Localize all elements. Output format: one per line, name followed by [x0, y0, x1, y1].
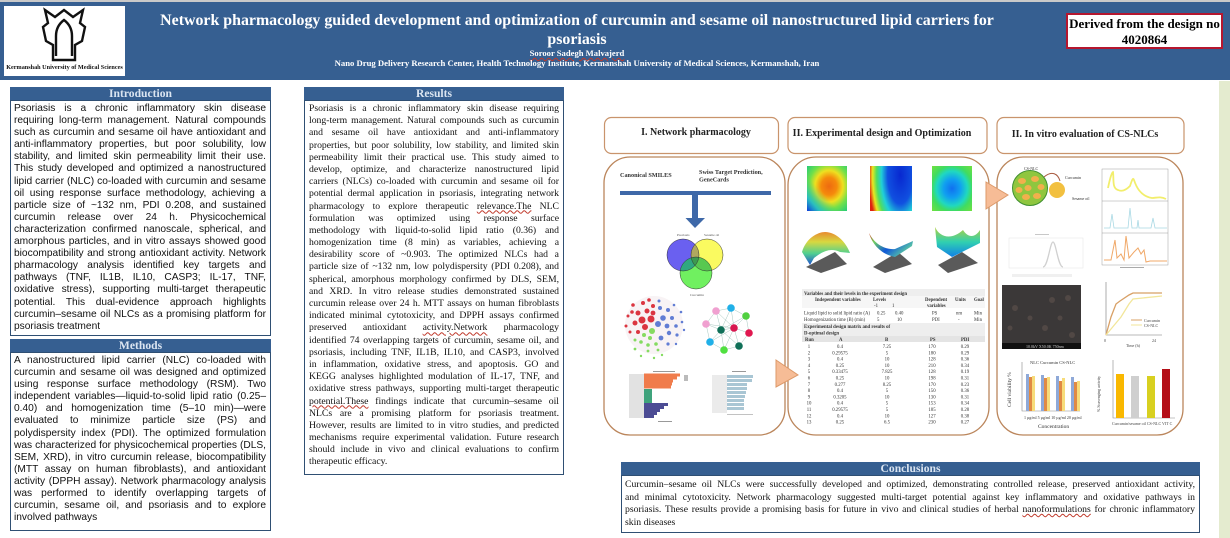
- text box: conclusions: and minimal cytotoxicity. Network pharmacology suggested multi-target potential against key inflammatory and oxidative pathways in: [625, 492, 1195, 502]
- chart: size distribution: [1009, 234, 1083, 277]
- SEM micrograph: 10.0kV X50.0K 750nm: [1026, 344, 1065, 349]
- text box: introduction: stability, and limited skin permeability limit their use.: [14, 151, 266, 162]
- table: experimental design: 0.29: [961, 345, 970, 350]
- table: experimental design: 0.23: [961, 383, 970, 388]
- database labels: [620, 169, 763, 184]
- table: experimental design: Independent variables: [815, 298, 861, 303]
- text box: results: homogenization time (8 min) as variables, achieving a: [309, 237, 559, 248]
- table: experimental design: Levels: [873, 298, 886, 303]
- table: experimental design: -1: [874, 304, 879, 309]
- table: experimental design: 12: [807, 414, 812, 419]
- chart: drug release: 24: [1152, 338, 1156, 343]
- icon: university emblem: [42, 7, 86, 62]
- text box: introduction: [10, 100, 271, 336]
- table: experimental design: 1: [808, 345, 811, 350]
- text box: results: long-term management. Natural compounds such as curcumin: [309, 115, 559, 126]
- table: experimental design: 0.3205: [833, 395, 847, 400]
- table: experimental design: 170: [928, 383, 936, 388]
- bar chart: antioxidant activity: % Scavenging activity: [1096, 376, 1101, 412]
- charts: spectra: [1102, 169, 1168, 268]
- table: experimental design: 3: [808, 358, 811, 363]
- panel body: experimental design: [788, 157, 989, 435]
- chart: drug release: Curcumin: [1144, 318, 1160, 323]
- panel header: network pharmacology: [604, 118, 778, 154]
- panel header: experimental design: II. Experimental design and Optimization: [793, 128, 972, 139]
- table: experimental design: 0.4: [837, 402, 844, 407]
- text box: introduction: psoriasis treatment: [14, 321, 100, 332]
- text box: methods: (MTT assay on human fibroblasts), and antioxidant: [14, 464, 266, 475]
- text box: results: Psoriasis is a chronic inflammatory skin disease requiring: [309, 103, 559, 114]
- text box: results: indicated minimal cytotoxicity, and DPPH assays confirmed: [309, 310, 559, 321]
- table: experimental design: 10: [885, 414, 890, 419]
- text box: methods: polydispersity index (PDI). The optimized formulation: [14, 428, 266, 439]
- text box: results: mechanisms require experimental validation. Future research: [309, 432, 559, 443]
- text box: introduction: pharmacology analysis identified key targets and: [14, 260, 266, 271]
- 3D response surfaces: [802, 227, 980, 273]
- table: experimental design: 0.4: [837, 414, 844, 419]
- bar chart: antioxidant activity: [1096, 360, 1175, 426]
- table: experimental design: 0.29575: [832, 408, 848, 413]
- table: experimental design: 10: [885, 376, 890, 382]
- text box: results: potential dermal application in psoriasis, integrating network: [309, 188, 559, 199]
- table: experimental design: PDI: [932, 318, 940, 323]
- text box: results: properties, but poor solubility, low stability, and limited skin: [309, 140, 559, 151]
- table: experimental design: 0.4: [837, 345, 844, 350]
- table: experimental design: Goal: [974, 298, 985, 303]
- table: experimental design: 0.38: [961, 414, 970, 419]
- table: experimental design: [802, 289, 985, 426]
- venn diagram: Sesame oil: [704, 233, 719, 237]
- table: experimental design: 0.29575: [832, 351, 848, 356]
- table: experimental design: 0.36: [961, 389, 970, 394]
- text box: results: KEGG analyses highlighted modulation of IL-17, TNF, and: [309, 371, 559, 382]
- chart: drug release: [1104, 282, 1162, 348]
- text box: methods: curcumin and sesame oil was designed and optimized: [14, 367, 266, 378]
- bar chart: cell viability: NLC Curcumin CS-NLC: [1030, 360, 1075, 365]
- panel header: network pharmacology: I. Network pharmacology: [641, 127, 751, 138]
- text box: conclusions: skin diseases: [625, 516, 675, 528]
- table: experimental design: 8.25: [883, 383, 892, 388]
- heading: introduction: [10, 87, 271, 100]
- table: experimental design: 7.25: [883, 345, 892, 350]
- database labels: GeneCards: [699, 176, 729, 184]
- text box: results: carriers (NLCs) co-loaded with curcumin and sesame oil for: [309, 176, 559, 187]
- table: experimental design: 10: [885, 364, 890, 369]
- venn diagram: [667, 233, 723, 297]
- text box: introduction: such as curcumin and sesame oil have antioxidant and: [14, 127, 266, 138]
- bar chart: antioxidant activity: Curcumin/sesame oil CS-NLC: [1112, 421, 1161, 426]
- table: experimental design: 9: [808, 395, 811, 400]
- table: experimental design: 5: [886, 351, 889, 356]
- panel: experimental design: [788, 118, 989, 435]
- table: experimental design: 2: [808, 351, 811, 356]
- table: experimental design: 210: [928, 364, 936, 369]
- table: experimental design: 5: [886, 389, 889, 394]
- SEM micrograph: [1002, 285, 1081, 349]
- text box: introduction: biocompatibility and strong antioxidant activity. Network: [14, 248, 266, 259]
- header banner: [0, 2, 1230, 80]
- heading: introduction: Introduction: [109, 87, 172, 100]
- table: experimental design: 0.40: [895, 312, 904, 316]
- table: experimental design: 185: [928, 408, 936, 413]
- text box: introduction: potential. This dual-evidence approach highlights: [14, 296, 266, 308]
- text box: results: curcumin release over 24 h. MTT assays on human fibroblasts: [309, 298, 559, 309]
- affiliation: Nano Drug Delivery Research Center, Health Technology Institute, Kermanshah University of Medical Sciences, Kermanshah, Iran: [335, 58, 819, 68]
- table: experimental design: 0.27: [961, 421, 970, 426]
- text box: results: psoriasis, including TNF, IL1B, IL10, and CASP3, involved: [309, 347, 559, 358]
- table: experimental design: 5: [808, 370, 811, 375]
- panel header: experimental design: [788, 118, 987, 154]
- chart: drug release: Time (h): [1126, 343, 1141, 348]
- heading: results: [304, 87, 564, 100]
- table: experimental design: 0.25: [836, 364, 845, 369]
- database labels: Canonical SMILES: [620, 172, 672, 179]
- table: experimental design: PS: [930, 338, 936, 343]
- table: experimental design: 4: [808, 364, 811, 369]
- arrow: databases to venn: [620, 191, 771, 228]
- heading: conclusions: Conclusions: [881, 462, 940, 475]
- heading: methods: [10, 339, 271, 352]
- table: experimental design: 0.19: [961, 370, 970, 375]
- text box: methods: SEM, XRD), in vitro curcumin release, biocompatibility: [14, 452, 266, 463]
- table: experimental design: 153: [928, 402, 936, 407]
- text box: results: desirability score of ~0.903. The optimized NLCs had a: [309, 249, 559, 260]
- network: clustered targets: [624, 296, 685, 359]
- text box: results: spherical, amorphous morphology confirmed by DLS, SEM,: [309, 274, 559, 285]
- arrow: panel II to panel III: [986, 182, 1008, 209]
- text box: results: However, results are limited to in vitro studies, and predicted: [309, 420, 559, 431]
- panel header: in vitro evaluation: II. In vitro evaluation of CS-NLCs: [1012, 129, 1158, 140]
- text box: methods: independent variables—liquid-to-solid lipid ratio (0.25–: [14, 391, 266, 402]
- table: experimental design: 6: [808, 376, 811, 382]
- text box: introduction: requiring long-term management. Natural compounds: [14, 115, 266, 126]
- table: experimental design: B: [885, 338, 889, 343]
- table: experimental design: Run: [805, 338, 814, 343]
- design number box: Derived from the design no 4020864: [1069, 16, 1220, 47]
- table: experimental design: 198: [928, 376, 936, 382]
- table: experimental design: 1: [892, 304, 895, 309]
- text box: results: identified 74 overlapping targets of curcumin, sesame oil, and: [309, 335, 559, 346]
- table: experimental design: 5: [886, 402, 889, 407]
- table: experimental design: Experimental design matrix and results of: [804, 325, 891, 330]
- table: experimental design: 8: [808, 389, 811, 394]
- text box: introduction: lipid carrier (NLC) co-loaded with curcumin and sesame: [14, 176, 266, 187]
- table: experimental design: 0.31: [961, 376, 970, 382]
- table: experimental design: Homogenization time (B) (min): [804, 318, 866, 323]
- text box: results: preserved antioxidant activity.Network pharmacology: [309, 322, 559, 333]
- bar chart: cell viability: [1007, 360, 1082, 430]
- contour plots: [807, 166, 972, 211]
- text box: conclusions: Curcumin–sesame oil NLCs were successfully developed and optimized, demonstrating controlled release, preserved antioxidant activity,: [625, 479, 1195, 490]
- table: experimental design: 0.277: [835, 383, 846, 388]
- text box: introduction: This study developed and optimized a nanostructured: [14, 163, 266, 174]
- table: experimental design: 0.29: [961, 351, 970, 356]
- table: experimental design: 10: [885, 358, 890, 363]
- table: experimental design: Min: [974, 312, 983, 316]
- table: experimental design: 0.31: [961, 395, 970, 400]
- panel: network pharmacology: [604, 118, 785, 435]
- text box: results: pharmacology to explore therapeutic relevance.The NLC: [309, 200, 559, 212]
- text box: introduction: oxidative stress), supporting multi-target therapeutic: [14, 284, 266, 295]
- text box: introduction: pathways (TNF, IL1B, IL10, CASP3; IL-17, TNF,: [14, 272, 266, 283]
- table: experimental design: 10: [807, 402, 812, 407]
- table: experimental design: 7: [808, 383, 811, 388]
- right side green strip: [1219, 81, 1230, 538]
- table: experimental design: 0.4: [837, 358, 844, 363]
- chart: drug release: CS-NLC: [1144, 323, 1159, 328]
- table: experimental design: variables: [927, 304, 946, 309]
- table: experimental design: 0.28: [961, 408, 970, 413]
- panel: in vitro evaluation: [997, 118, 1184, 435]
- table: experimental design: 0.25: [836, 376, 845, 382]
- arrow: panel I to panel II: [776, 360, 798, 387]
- bar chart: cell viability: Concentration: [1038, 424, 1069, 430]
- text box: methods: 0.40) and homogenization time (5–10 min)—were: [14, 403, 266, 414]
- text box: results: oxidative stress pathways, supporting multi-target therapeutic: [309, 383, 559, 394]
- bar chart: GO enrichment: [629, 371, 688, 422]
- table: experimental design: 0.36: [961, 358, 970, 363]
- table: experimental design: 10: [897, 318, 902, 323]
- text box: methods: activity (DPPH assay). Network pharmacology analysis: [14, 476, 266, 487]
- table: experimental design: 127: [928, 414, 936, 419]
- top strip: [0, 0, 1230, 2]
- text box: methods: [10, 352, 271, 531]
- text box: introduction: characterization confirmed nanoscale, spherical, and: [14, 224, 266, 235]
- database labels: Swiss Target Prediction,: [699, 169, 763, 176]
- table: experimental design: PS: [932, 312, 938, 316]
- text box: introduction: particle size of ~132 nm, PDI 0.208, and sustained: [14, 200, 266, 211]
- text box: methods: evaluated to minimize particle size (PS) and: [14, 415, 266, 426]
- text box: conclusions: [621, 475, 1200, 533]
- table: experimental design: A: [839, 338, 843, 343]
- text box: results: and XRD. In vitro release studies demonstrated sustained: [309, 286, 559, 297]
- table: experimental design: 7.825: [882, 370, 893, 375]
- venn diagram: Psoriasis: [677, 233, 690, 237]
- table: experimental design: 0.4: [837, 389, 844, 394]
- table: experimental design: 130: [928, 395, 936, 400]
- bar chart: cell viability: 1 µg/ml 5 µg/ml 10 µg/ml 20 µg/ml: [1024, 415, 1082, 420]
- heading: conclusions: [621, 462, 1200, 475]
- table: experimental design: 5: [886, 408, 889, 413]
- text box: results: permeability limit their practical use. This study aimed to: [309, 152, 559, 163]
- text box: introduction: curcumin release over 24 h. Physicochemical: [14, 212, 266, 223]
- table: experimental design: Liquid lipid to solid lipid ratio (A): [804, 312, 870, 316]
- table: experimental design: nm: [956, 312, 962, 316]
- panel: results: [304, 87, 564, 475]
- table: experimental design: 150: [928, 389, 936, 394]
- chart: drug release: 0: [1104, 338, 1106, 343]
- table: experimental design: Variables and their levels in the experiment design: [804, 292, 907, 297]
- table: experimental design: 6.5: [884, 421, 891, 426]
- text box: methods: curcumin, sesame oil, and psoriasis and to explore: [14, 500, 266, 511]
- text box: conclusions: psoriasis. These results provide a promising basis for future in vivo and clinical studies of herbal nanoformulations for chronic inflammatory: [625, 504, 1195, 515]
- text box: methods: using response surface methodology (RSM). Two: [14, 379, 266, 390]
- table: experimental design: 5: [877, 318, 880, 323]
- table: experimental design: D-optimal design: [804, 332, 839, 336]
- bar chart: antioxidant activity: VIT C: [1162, 421, 1173, 426]
- panel body: in vitro evaluation: [997, 157, 1183, 435]
- text box: results: [304, 100, 564, 475]
- text box: introduction: anti-inflammatory properties, but poor solubility, low: [14, 139, 266, 150]
- table: experimental design: PDI: [961, 338, 969, 343]
- text box: results: methodology with liquid-to-solid lipid ratio (0.36) and: [309, 225, 559, 236]
- text box: introduction: amorphous particles, and in vitro assays showed good: [14, 236, 266, 247]
- heading: methods: Methods: [119, 339, 162, 352]
- table: experimental design: -: [958, 318, 960, 323]
- text box: methods: was performed to identify overlapping targets of: [14, 488, 266, 499]
- text box: methods: involved pathways: [14, 512, 97, 523]
- table: experimental design: 170: [928, 345, 936, 350]
- diagram: CS-NLC particle: Curcumin: [1065, 175, 1081, 180]
- table: experimental design: 128: [928, 370, 936, 375]
- diagram: CS-NLC particle: CS-NLC: [1024, 166, 1039, 171]
- text box: introduction: curcumin–sesame oil NLCs as a promising platform for: [14, 309, 266, 320]
- table: experimental design: 11: [807, 408, 812, 413]
- text box: results: therapeutic efficacy.: [309, 456, 387, 467]
- author: Soroor Sadegh Malvajerd: [530, 48, 624, 58]
- graphical abstract figure: [603, 116, 1185, 436]
- text box: methods: A nanostructured lipid carrier (NLC) co-loaded with: [14, 355, 266, 366]
- table: experimental design: 0.34: [961, 364, 970, 369]
- table: experimental design: 180: [928, 351, 936, 356]
- text box: results: formulation was optimized using response surface: [309, 213, 559, 224]
- title: Network pharmacology guided development and optimization of curcumin and sesame oil nanostructured lipid carriers for psoriasis: [160, 12, 994, 48]
- venn diagram: Curcumin: [690, 293, 704, 297]
- diagram: CS-NLC particle: Sesame oil: [1072, 196, 1090, 201]
- network: hub genes: [702, 304, 753, 354]
- table: experimental design: Units: [955, 298, 966, 303]
- text box: results: develop, optimize, and characterize nanostructured lipid: [309, 164, 559, 175]
- bar chart: cell viability: Cell viability %: [1007, 372, 1013, 407]
- text box: introduction: Psoriasis is a chronic inflammatory skin disease: [14, 103, 266, 114]
- logo: [4, 6, 125, 76]
- table: experimental design: 0.25: [836, 421, 845, 426]
- text box: introduction: oil using response surface methodology, achieving a: [14, 188, 266, 199]
- panel header: in vitro evaluation: [997, 118, 1184, 154]
- table: experimental design: 0.34: [961, 402, 970, 407]
- heading: results: Results: [416, 87, 452, 100]
- table: experimental design: 13: [807, 421, 812, 426]
- text box: results: in inflammation, oxidative stress, and apoptosis. GO and: [309, 359, 559, 370]
- text box: methods: was characterized for physicochemical properties (DLS,: [14, 440, 266, 451]
- table: experimental design: Dependent: [925, 298, 948, 303]
- text box: results: should include in vivo and clinical evaluations to confirm: [309, 444, 559, 455]
- panel body: network pharmacology: [604, 157, 785, 435]
- bar chart: KEGG pathways: [712, 371, 753, 415]
- panel: conclusions: [621, 462, 1200, 533]
- panel: introduction: [10, 87, 271, 336]
- table: experimental design: 10: [885, 395, 890, 400]
- table: experimental design: 0.25: [877, 312, 886, 316]
- text box: results: and sesame oil have antioxidant and anti-inflammatory: [309, 127, 559, 138]
- text box: results: potential.These findings indicate that curcumin–sesame oil: [309, 396, 559, 406]
- text box: results: particle size of ~132 nm, low polydispersity (PDI 0.208), and: [309, 261, 559, 272]
- table: experimental design: 128: [928, 358, 936, 363]
- logo caption: Kermanshah University of Medical Sciences: [6, 64, 123, 71]
- table: experimental design: 230: [928, 421, 936, 426]
- panel: methods: [10, 339, 271, 531]
- text box: results: NLCs are a promising platform for psoriasis treatment.: [309, 408, 559, 419]
- table: experimental design: 0.33475: [832, 370, 848, 375]
- table: experimental design: Min: [974, 318, 983, 323]
- diagram: CS-NLC particle: [1012, 166, 1090, 206]
